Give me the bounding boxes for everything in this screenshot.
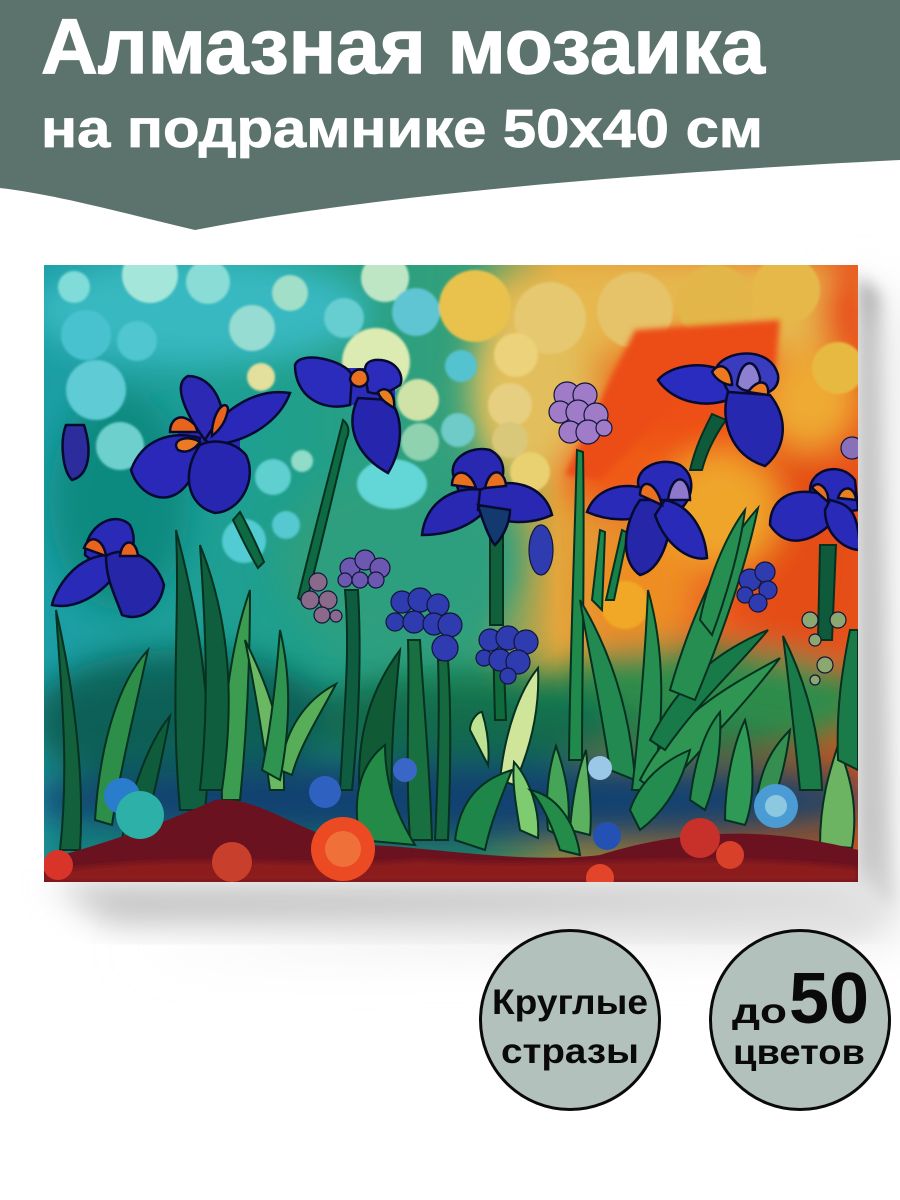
painting: iris top centre xyxy=(295,358,401,473)
title: Алмазная мозаика xyxy=(41,2,766,90)
painting background colour fields xyxy=(30,255,900,838)
badge: up to 50 colours: цветов xyxy=(733,1033,865,1072)
painting: iris right edge xyxy=(770,469,860,550)
painting: leaves xyxy=(56,414,858,855)
painting: iris centre xyxy=(422,449,552,545)
painting: iris large left xyxy=(131,376,290,513)
painting: orange paint patch xyxy=(565,320,780,480)
painting: soil xyxy=(43,756,858,892)
painting: iris right top xyxy=(658,353,783,466)
subtitle: на подрамнике 50х40 см xyxy=(41,99,763,159)
header banner xyxy=(0,0,900,230)
painting: iris right centre xyxy=(587,462,707,575)
badge: up to 50 colours: до xyxy=(732,992,787,1031)
canvas drop shadow xyxy=(50,275,900,950)
painting swirl dots xyxy=(58,247,864,629)
painting: dark lower wash xyxy=(44,680,858,859)
badge: up to 50 colours xyxy=(710,930,890,1110)
badge: up to 50 colours: 50 xyxy=(789,959,869,1039)
badge: round rhinestones: стразы xyxy=(501,1032,639,1071)
badge: round rhinestones xyxy=(480,930,660,1110)
painting: flower stems xyxy=(298,420,348,604)
painting: irises xyxy=(44,265,858,882)
painting: clustered blossoms xyxy=(301,382,863,685)
painting: iris left small xyxy=(52,425,164,617)
badge: round rhinestones: Круглые xyxy=(492,983,648,1022)
